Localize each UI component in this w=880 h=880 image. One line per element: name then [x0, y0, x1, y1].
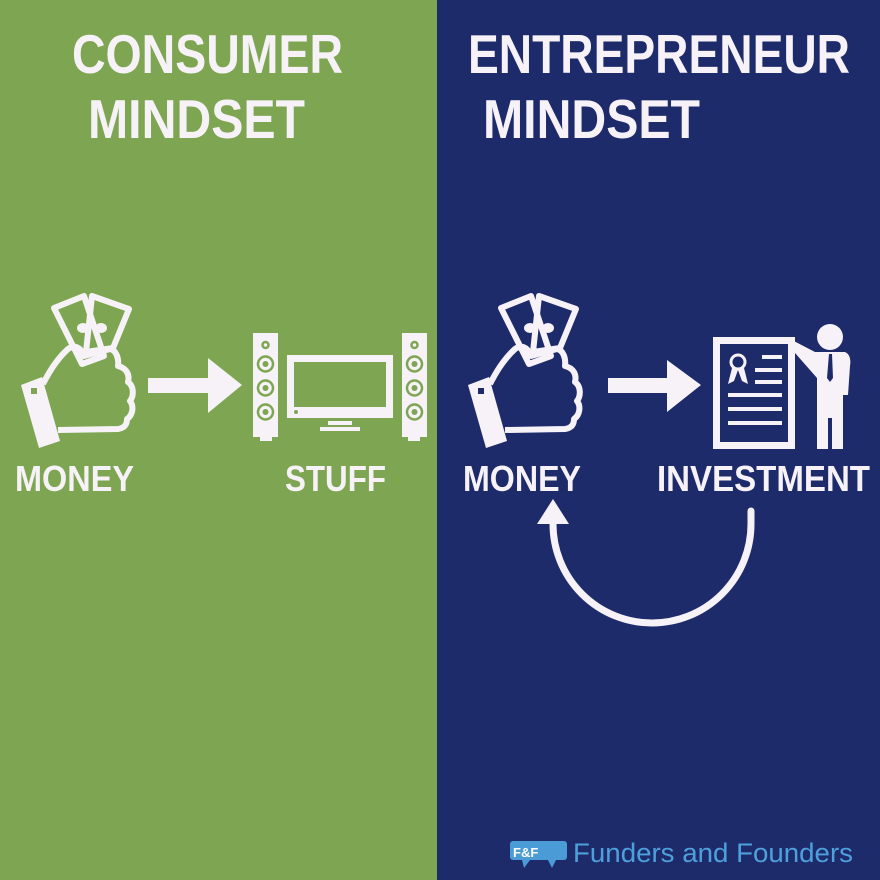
icon: TV and speakers — [253, 333, 427, 441]
icon: document and presenter — [713, 324, 850, 449]
panel: entrepreneur mindset — [437, 0, 880, 880]
label: money: MONEY — [463, 458, 581, 499]
title: consumer mindset — [72, 23, 343, 150]
title: entrepreneur mindset: MINDSET — [483, 88, 700, 150]
title: consumer mindset: CONSUMER — [72, 23, 343, 85]
logo: Funders and Founders: Funders and Founders — [573, 838, 853, 868]
arrow: cycle back to money — [537, 499, 751, 623]
label: stuff: STUFF — [285, 458, 386, 499]
arrow: money to stuff — [148, 358, 242, 413]
icon: hand holding money — [20, 290, 136, 450]
label: money: MONEY — [15, 458, 134, 499]
icon: hand holding money — [467, 290, 583, 450]
title: entrepreneur mindset — [468, 23, 850, 150]
panel: consumer mindset — [0, 0, 437, 880]
title: consumer mindset: MINDSET — [88, 88, 305, 150]
arrow: money to investment — [608, 360, 701, 412]
logo: Funders and Founders: F&F — [513, 845, 538, 860]
